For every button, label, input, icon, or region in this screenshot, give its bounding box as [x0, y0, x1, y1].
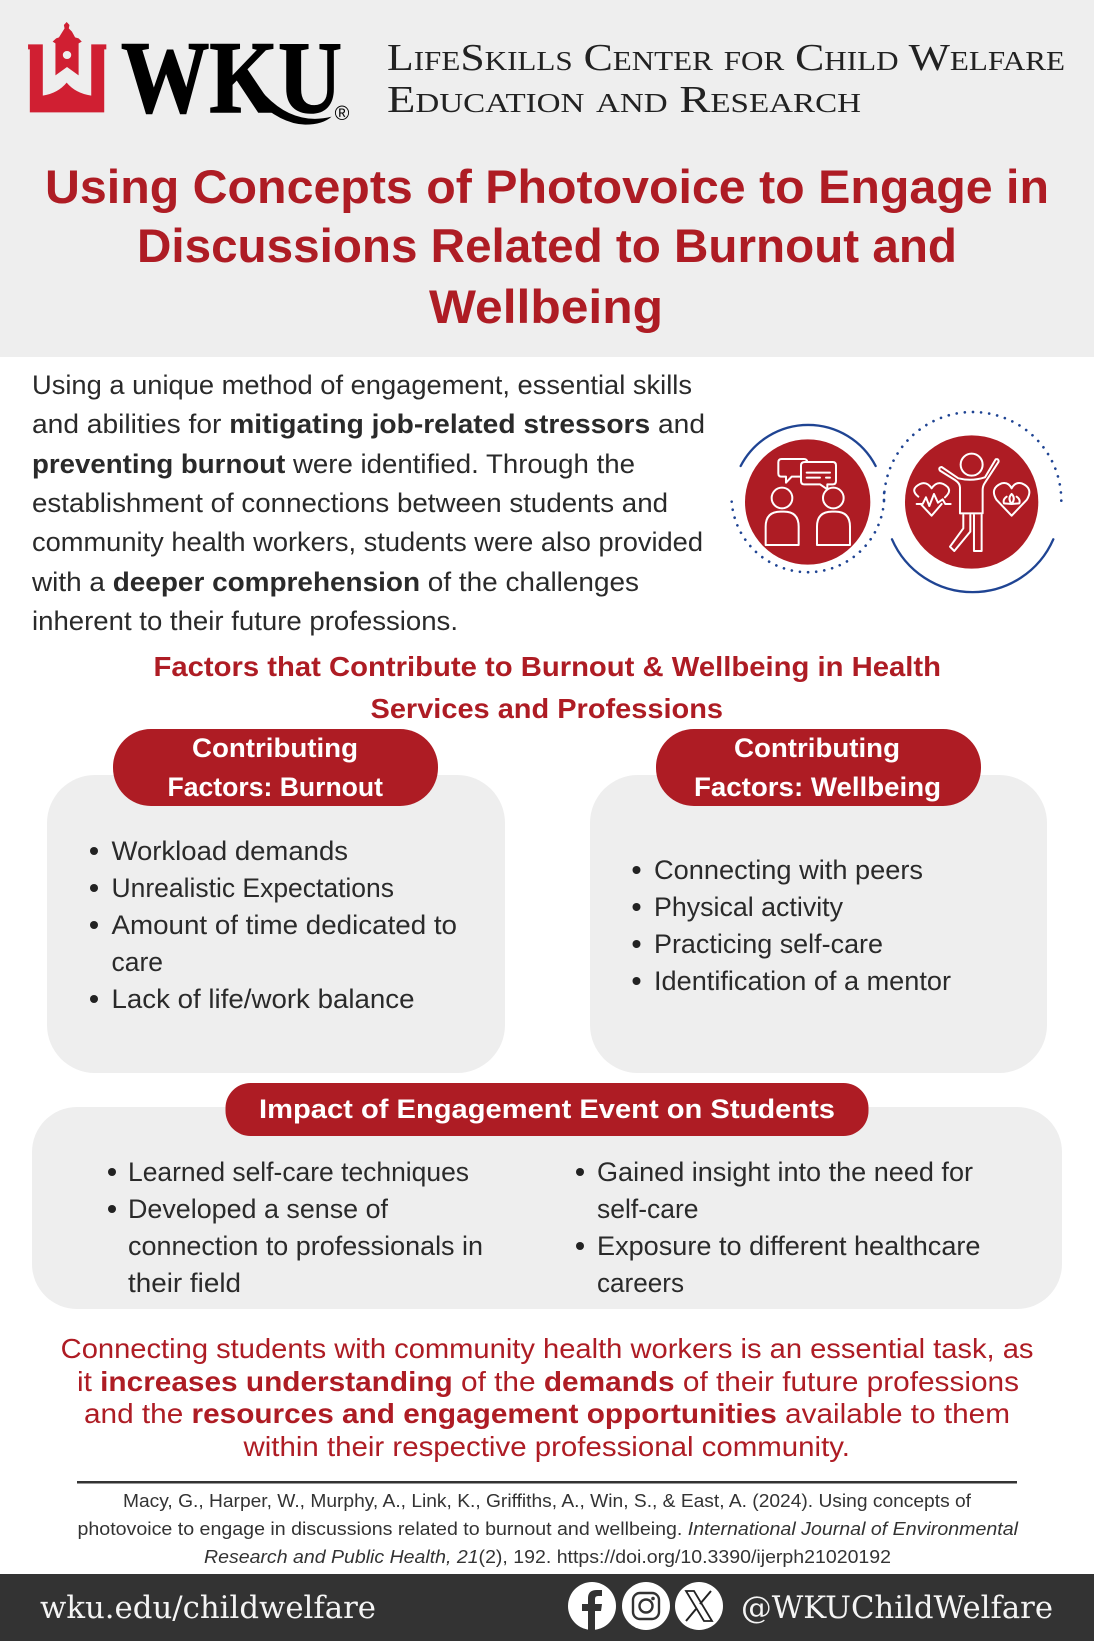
pill heading: wellbeing: [656, 729, 981, 806]
pill heading: impact: Impact of Engagement Event on Students: [259, 1094, 835, 1124]
intro paragraph: community health workers, students were also provided: [32, 527, 703, 557]
impact list right: self-care: [597, 1194, 698, 1224]
icon: conversation circle: [732, 425, 884, 572]
burnout list: Unrealistic Expectations: [112, 873, 394, 903]
burnout list: Amount of time dedicated to: [112, 910, 457, 940]
wellbeing list: Physical activity: [654, 892, 843, 922]
citation: Research and Public Health, 21 (2), 192. https://doi.org/10.3390/ijerph21020192: [204, 1547, 891, 1567]
impact list left: Developed a sense of: [128, 1194, 388, 1224]
title: Using Concepts of Photovoice to Engage in: [45, 160, 1049, 213]
impact list right: [576, 1157, 980, 1298]
registered mark: ®: [335, 103, 350, 125]
burnout list: [90, 836, 457, 1014]
title: Discussions Related to Burnout and: [137, 219, 957, 272]
icon: WKU red cupola shield: [28, 22, 106, 112]
citation: photovoice to engage in discussions related to burnout and wellbeing. International Journal of Environmental: [78, 1519, 1019, 1539]
burnout list: care: [112, 947, 163, 977]
wellbeing list: Connecting with peers: [654, 855, 923, 885]
pill heading: burnout: [113, 729, 438, 806]
icon: X: [675, 1582, 723, 1630]
intro paragraph: [31, 370, 705, 636]
section heading: [154, 651, 941, 724]
section heading: Factors that Contribute to Burnout & Wellbeing in Health: [154, 651, 941, 682]
organisation name: [387, 37, 1065, 121]
impact list right: careers: [597, 1268, 684, 1298]
icon: instagram: [622, 1582, 670, 1630]
section heading: Services and Professions: [370, 693, 723, 724]
impact list left: Learned self-care techniques: [128, 1157, 469, 1187]
panel: wellbeing factors: [590, 729, 1047, 1073]
impact list right: Gained insight into the need for: [597, 1157, 973, 1187]
icon: facebook: [568, 1582, 616, 1630]
intro paragraph: with a deeper comprehension of the challenges: [31, 567, 639, 597]
pill heading: burnout: Factors: Burnout: [168, 772, 383, 802]
title: [45, 160, 1049, 333]
closing statement: Connecting students with community health workers is an essential task, as: [61, 1333, 1033, 1364]
icon: wellbeing circle: [884, 412, 1061, 592]
wellbeing list: Identification of a mentor: [654, 966, 951, 996]
social handle: @WKUChildWelfare: [741, 1590, 1053, 1626]
footer bar: [0, 1574, 1094, 1641]
closing statement: [61, 1333, 1033, 1462]
impact list left: connection to professionals in: [128, 1231, 483, 1261]
impact list right: Exposure to different healthcare: [597, 1231, 980, 1261]
intro paragraph: inherent to their future professions.: [32, 606, 458, 636]
citation: [78, 1491, 1019, 1567]
WKU logo: [28, 21, 350, 135]
organisation name: Education and Research: [387, 79, 861, 121]
closing statement: it increases understanding of the demands of their future professions: [77, 1366, 1019, 1397]
intro paragraph: establishment of connections between students and: [32, 488, 668, 518]
closing statement: and the resources and engagement opportunities available to them: [84, 1398, 1010, 1429]
panel: impact on students: [32, 1083, 1062, 1309]
WKU wordmark: WKU: [121, 21, 342, 135]
intro paragraph: and abilities for mitigating job-related stressors and: [32, 409, 705, 439]
wordmark swoosh: [239, 75, 332, 125]
intro paragraph: Using a unique method of engagement, essential skills: [32, 370, 692, 400]
burnout list: Lack of life/work balance: [112, 984, 414, 1014]
panel: burnout factors: [47, 729, 505, 1073]
organisation name: LifeSkills Center for Child Welfare: [387, 37, 1065, 79]
impact list left: [108, 1157, 483, 1298]
header band: [0, 0, 1094, 357]
wellbeing list: Practicing self-care: [654, 929, 883, 959]
closing statement: within their respective professional community.: [242, 1431, 850, 1462]
title: Wellbeing: [429, 280, 663, 333]
wellbeing list: [632, 855, 951, 996]
citation: Macy, G., Harper, W., Murphy, A., Link, K., Griffiths, A., Win, S., & East, A. (2024). Using concepts of: [123, 1491, 972, 1511]
pill heading: burnout: Contributing: [192, 733, 358, 763]
burnout list: Workload demands: [112, 836, 348, 866]
illustration: people talking and wellbeing: [732, 412, 1061, 592]
impact list left: their field: [128, 1268, 241, 1298]
pill heading: wellbeing: Contributing: [734, 733, 900, 763]
pill heading: impact: [226, 1083, 868, 1136]
pill heading: wellbeing: Factors: Wellbeing: [694, 772, 941, 802]
intro paragraph: preventing burnout were identified. Through the: [32, 449, 635, 479]
website: wku.edu/childwelfare: [40, 1590, 376, 1626]
